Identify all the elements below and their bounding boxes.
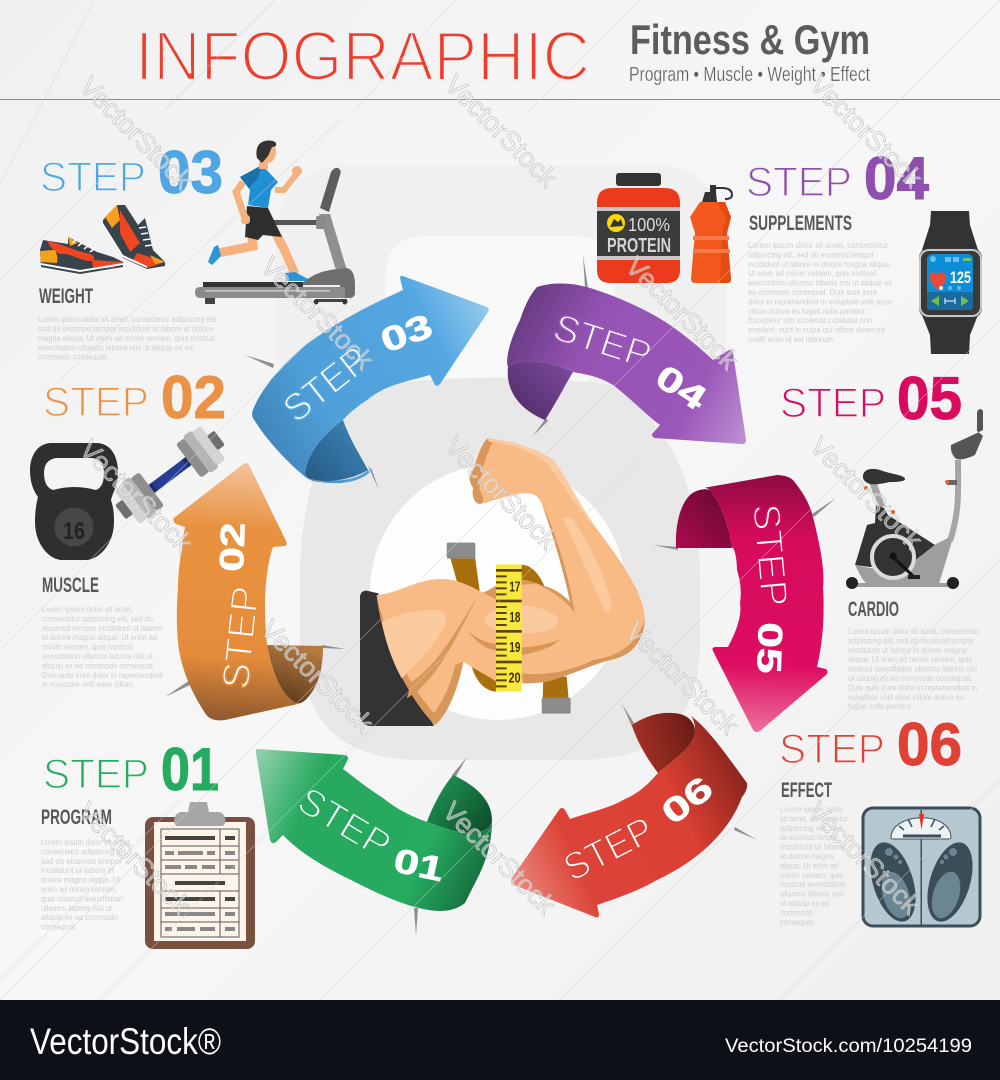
footer band	[0, 1000, 1000, 1080]
text block: effect: consequat.	[780, 918, 815, 927]
label: weight: WEIGHT	[39, 285, 93, 308]
icon: protein jar: PROTEIN	[607, 235, 671, 257]
heading: step 04: 04	[864, 145, 930, 212]
heading: step 06: STEP	[779, 725, 885, 772]
heading: step 01	[43, 736, 219, 803]
number: 03: 03	[376, 307, 438, 361]
text block: cardio: ut aliquip ex ea commodo consequat.	[848, 674, 973, 683]
text block: effect: do eiusmod tempor	[780, 833, 838, 842]
text block: weight: Lorem ipsum dolor sit amet, consectetur adipiscing elit,	[38, 315, 218, 324]
text block: supplements: incididunt ut labore et dolore magna aliqua.	[748, 260, 891, 269]
measuring tape: 17	[509, 580, 520, 596]
icon: clipboard	[145, 802, 255, 949]
label: supplements: SUPPLEMENTS	[749, 212, 852, 235]
measuring tape: 19	[509, 640, 520, 656]
text block: supplements	[748, 241, 893, 344]
spike shadows around arrows	[165, 255, 836, 936]
tape ends	[447, 543, 571, 714]
heading: step 03	[40, 139, 223, 206]
number: 02: 02	[213, 522, 253, 572]
heading: step 02: 02	[161, 364, 226, 431]
watermarks: VectorStock	[74, 434, 199, 559]
text block: program: enim ad minim veniam,	[41, 885, 117, 894]
text block: cardio: Duis aute irure dolor in reprehenderit in	[848, 683, 977, 692]
arrow: step 03 blue	[252, 276, 489, 483]
heading: step 06: 06	[897, 711, 962, 778]
text block: muscle: Duis aute irure dolor in reprehenderit	[42, 671, 164, 680]
watermarks: VectorStock	[439, 69, 564, 194]
label: step 05: STEP	[744, 502, 795, 608]
watermarks: VectorStock	[72, 796, 197, 921]
icon: dumbbell	[107, 419, 233, 531]
heading: step 06	[779, 711, 962, 778]
text block: muscle: Lorem ipsum dolor sit amet,	[42, 605, 133, 614]
header: subtitle: Fitness & Gym	[630, 16, 870, 63]
heading: step 03: STEP	[40, 153, 146, 200]
heading: step 01: STEP	[43, 750, 149, 797]
heading: step 04: STEP	[746, 158, 852, 205]
icon: runner on treadmill	[195, 141, 355, 304]
heading: step 05: STEP	[780, 379, 886, 426]
text block: weight: magna aliqua. Ut enim ad minim veniam, quis nostrud	[38, 334, 215, 343]
arm highlights	[382, 438, 612, 678]
text block: muscle: aliquip ex ea commodo consequat.	[42, 661, 155, 670]
arm shading	[377, 438, 645, 725]
text block: effect: ut aliquip ex ea	[780, 899, 829, 908]
left shoe	[40, 237, 123, 274]
text block: cardio: adipiscing elit, sed do eiusmod tempor	[848, 636, 974, 645]
label: program: PROGRAM	[41, 806, 112, 829]
arm skin	[377, 438, 645, 725]
text block: supplements: proident, sunt in culpa qui officia deserunt	[748, 326, 886, 335]
text block: program: incididunt ut labore et	[41, 866, 115, 875]
text block: program: sed do eiusmod tempor	[41, 857, 122, 866]
heading: step 03: 03	[158, 139, 223, 206]
text block: effect: et dolore magna	[780, 852, 835, 861]
arrow: step 05 magenta	[676, 475, 828, 732]
arrow: step 06 red	[511, 713, 747, 918]
text block: effect: nostrud exercitation	[780, 880, 846, 889]
text block: supplements: exercitation ullamco laboris nisi ut aliquip ex	[748, 279, 892, 288]
heading: step 02: STEP	[43, 378, 149, 425]
text block: muscle: consectetur adipiscing elit, sed do	[42, 614, 154, 623]
text block: program	[41, 838, 132, 932]
measuring tape	[496, 564, 522, 692]
sleeve	[360, 591, 434, 726]
text block: weight: exercitation ullamco laboris nisi ut aliquip ex ea	[38, 344, 194, 352]
text block: supplements: ea commodo consequat. Duis aute irure	[748, 288, 877, 297]
number: 01: 01	[390, 842, 447, 889]
label: muscle: MUSCLE	[42, 574, 99, 597]
label: step 06: STEP	[557, 809, 661, 890]
text block: weight: commodo consequat.	[38, 352, 109, 362]
header: title: INFOGRAPHIC	[135, 17, 590, 95]
label: step 03: STEP	[276, 339, 377, 431]
text block: effect: Lorem ipsum dolor	[780, 805, 843, 814]
text block: supplements: Ut enim ad minim veniam, quis nostrud	[748, 269, 876, 278]
watermarks: VectorStock	[802, 796, 927, 921]
watermarks: VectorStock	[437, 796, 562, 921]
icon: sneakers	[40, 205, 165, 274]
right shoe	[102, 205, 165, 269]
text block: muscle: eiusmod tempor incididunt ut labore	[42, 624, 163, 633]
heading: step 02	[43, 364, 226, 431]
text block: effect: ullamco laboris nisi	[780, 890, 843, 899]
footer logo: VectorStock®	[30, 1021, 221, 1062]
text block: effect: incididunt ut labore	[780, 843, 846, 852]
text block: muscle: et dolore magna aliqua. Ut enim ad	[42, 633, 157, 642]
watermarks: VectorStock	[804, 431, 929, 556]
heading: step 05	[780, 365, 962, 432]
text block: effect: aliqua. Ut enim ad	[780, 861, 838, 870]
number: 06: 06	[655, 769, 720, 832]
number: 05: 05	[749, 622, 789, 674]
man	[208, 141, 308, 281]
text block: effect: adipiscing elit, sed	[780, 824, 842, 833]
text block: program: aliquip ex ea commodo	[41, 913, 119, 922]
text block: supplements: cillum dolore eu fugiat nulla pariatur.	[748, 307, 867, 316]
watermarks: VectorStock	[255, 614, 380, 739]
icon: protein jar	[597, 173, 680, 283]
text block: program: Lorem ipsum dolor sit amet,	[41, 838, 132, 847]
watermarks: VectorStock	[804, 69, 929, 194]
text block: program: quis nostrud exercitation	[41, 894, 123, 903]
watermarks: VectorStock	[620, 251, 745, 376]
header divider	[0, 99, 1000, 100]
icon: flexed arm with measuring tape	[360, 438, 645, 726]
text block: muscle	[42, 605, 164, 689]
icon: kettlebell	[30, 443, 118, 560]
heading: step 01: 01	[161, 736, 219, 803]
label: step 02: STEP	[215, 584, 268, 691]
measuring tape: 20	[509, 670, 521, 686]
text block: cardio: aliqua. Ut enim ad minim veniam, quis	[848, 655, 972, 664]
label: step 01: STEP	[290, 780, 398, 867]
watermarks: VectorStock	[255, 251, 380, 376]
icon: bathroom scale	[862, 808, 981, 927]
text block: supplements: mollit anim id est laborum.	[748, 335, 835, 344]
text block: effect: minim veniam, quis	[780, 871, 843, 880]
heading: step 05: 05	[897, 365, 962, 432]
arrow: step 04 purple	[507, 283, 746, 444]
icon: kettlebell: 16	[63, 518, 85, 545]
text block: effect: commodo	[780, 908, 814, 917]
text block: cardio: Lorem ipsum dolor sit amet, consectetur	[848, 627, 979, 636]
text block: muscle: minim veniam, quis nostrud	[42, 643, 133, 652]
text block: weight	[38, 315, 218, 362]
text block: effect	[780, 805, 848, 927]
icon: water bottle	[690, 185, 732, 283]
icon: exercise bike	[846, 409, 983, 589]
text block: cardio	[848, 627, 979, 711]
number: 04: 04	[649, 358, 713, 418]
ghost kettlebell behind arrows	[275, 165, 727, 760]
text block: effect: sit amet, consectetur	[780, 814, 848, 823]
watermarks: VectorStock	[439, 431, 564, 556]
label: cardio: CARDIO	[848, 598, 899, 621]
arrow: step 02 orange	[173, 463, 323, 720]
arrow: step 01 green	[256, 749, 492, 911]
heading: step 04	[746, 145, 930, 212]
footer image id: VectorStock.com/10254199	[725, 1035, 972, 1057]
watermarks: VectorStock	[620, 616, 745, 741]
text block: cardio: voluptate velit esse cillum dolore eu	[848, 693, 964, 702]
text block: cardio: fugiat nulla pariatur.	[848, 702, 913, 711]
watermarks: VectorStock	[74, 71, 199, 196]
watermarks	[72, 69, 929, 921]
text block: program: ullamco laboris nisi ut	[41, 904, 113, 913]
label: effect: EFFECT	[781, 779, 832, 802]
text block: program: consequat.	[41, 923, 77, 932]
text block: cardio: incididunt ut labore et dolore magna	[848, 646, 968, 655]
header: tagline: Program • Muscle • Weight • Effect	[629, 64, 870, 86]
text block: supplements: adipiscing elit, sed do eiusmod tempor	[748, 250, 874, 259]
measuring tape: 18	[509, 610, 520, 626]
text block: supplements: Lorem ipsum dolor sit amet, consectetur	[748, 241, 888, 250]
text block: cardio: nostrud exercitation ullamco laboris nisi	[848, 665, 977, 674]
treadmill	[195, 168, 355, 304]
icon: smart watch	[919, 211, 982, 354]
white circle behind arm	[370, 464, 626, 720]
icon: smart watch: 125	[950, 268, 971, 287]
text block: muscle: in voluptate velit esse cillum.	[42, 680, 135, 689]
text block: muscle: exercitation ullamco laboris nisi ut	[42, 652, 154, 661]
text block: supplements: Excepteur sint occaecat cupidatat non	[748, 316, 872, 325]
text block: program: dolore magna aliqua. Ut	[41, 876, 121, 885]
text block: program: consectetur adipiscing elit,	[41, 847, 128, 856]
label: step 04: STEP	[548, 307, 656, 377]
icon: protein jar: 100%	[628, 215, 670, 235]
text block: supplements: dolor in reprehenderit in voluptate velit esse	[748, 297, 893, 306]
text block: weight: sed do eiusmod tempor incididunt ut labore et dolore	[38, 324, 214, 334]
